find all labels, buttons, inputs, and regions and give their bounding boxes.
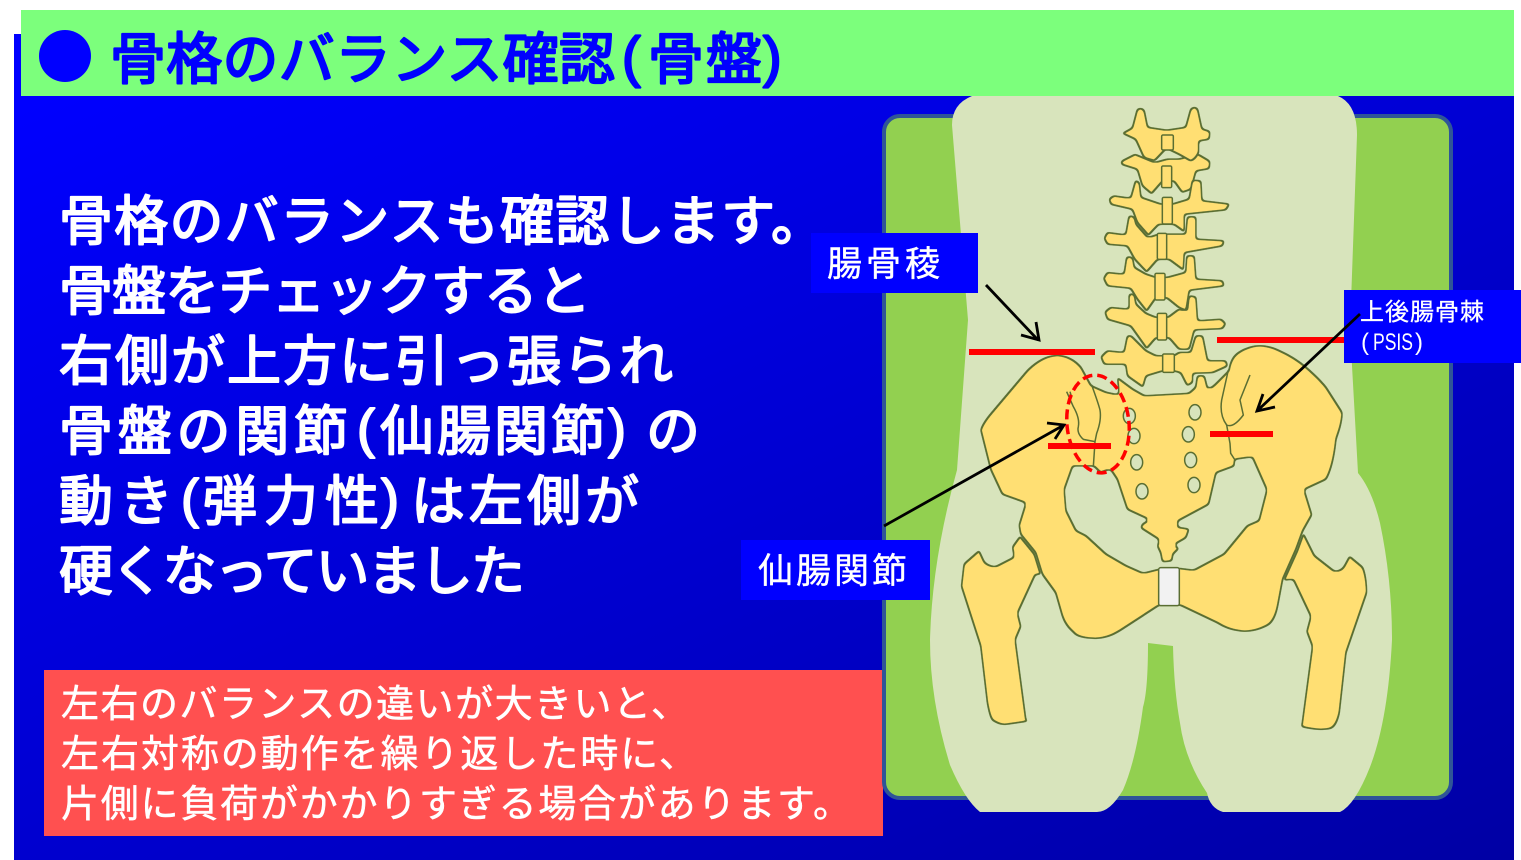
callout: balance warning: 左右のバランスの違いが大きいと、 xyxy=(61,684,689,726)
red level marker: right iliac crest xyxy=(1217,337,1344,343)
label: PSIS xyxy=(1344,290,1521,363)
title text: ( xyxy=(622,25,641,88)
main explanation text: 骨格のバランスも確認します。 xyxy=(59,192,825,252)
main explanation text: 骨盤の関節 xyxy=(59,402,348,462)
lumbar vertebrae xyxy=(1100,107,1231,388)
label: iliac crest xyxy=(811,233,978,293)
main explanation text: 仙腸関節 xyxy=(380,402,605,462)
red level marker: left iliac crest xyxy=(969,349,1095,355)
label: PSIS: PSIS xyxy=(1373,329,1413,356)
main explanation text: は左側が xyxy=(411,472,639,532)
callout: balance warning xyxy=(44,670,883,836)
callout: balance warning: 片側に負荷がかかりすぎる場合があります。 xyxy=(61,784,851,826)
callout: balance warning: 左右対称の動作を繰り返した時に、 xyxy=(61,734,697,776)
red level marker: right PSIS xyxy=(1210,431,1273,437)
main explanation text: 右側が上方に引っ張られ xyxy=(59,332,673,392)
dashed circle: sacroiliac joint xyxy=(1062,372,1134,476)
main explanation text: ) xyxy=(381,469,399,529)
label: PSIS: ( xyxy=(1361,329,1369,356)
main explanation text: 動き xyxy=(59,472,173,532)
left femur xyxy=(961,535,1042,725)
sacroiliac joint lines xyxy=(1067,370,1250,467)
panel: green illustration background xyxy=(884,116,1451,798)
icon: title bullet xyxy=(39,30,91,82)
illustration: body silhouette xyxy=(930,96,1392,812)
pubic symphysis xyxy=(1159,568,1179,606)
main explanation text: ( xyxy=(181,469,199,529)
label: sacroiliac joint xyxy=(741,540,930,600)
title banner xyxy=(21,10,1514,96)
label: PSIS: 上後腸骨棘 xyxy=(1360,299,1484,326)
main explanation text xyxy=(59,192,825,602)
main explanation text: 硬くなっていました xyxy=(59,542,525,602)
label: iliac crest: 腸骨稜 xyxy=(827,245,940,284)
title text: ) xyxy=(763,25,782,88)
arrow: to sacroiliac joint xyxy=(884,423,1064,526)
label: PSIS: ) xyxy=(1415,329,1423,356)
sacral foramina xyxy=(1123,405,1201,499)
main explanation text: 骨盤をチェックすると xyxy=(59,262,591,322)
main explanation text: 弾力性 xyxy=(203,472,379,532)
title text: 骨盤 xyxy=(648,28,762,91)
red level marker: left PSIS xyxy=(1048,443,1111,449)
arrow: to PSIS xyxy=(1257,314,1360,411)
pelvis xyxy=(980,345,1343,639)
title text: 骨格のバランス確認 xyxy=(110,28,615,91)
illustration: skeleton xyxy=(961,107,1367,730)
arrow: to iliac crest xyxy=(986,285,1039,340)
label: sacroiliac joint: 仙腸関節 xyxy=(758,552,907,591)
main explanation text: の xyxy=(646,402,700,462)
main explanation text: ( xyxy=(357,399,375,459)
right femur xyxy=(1283,532,1367,730)
main explanation text: ) xyxy=(608,399,626,459)
